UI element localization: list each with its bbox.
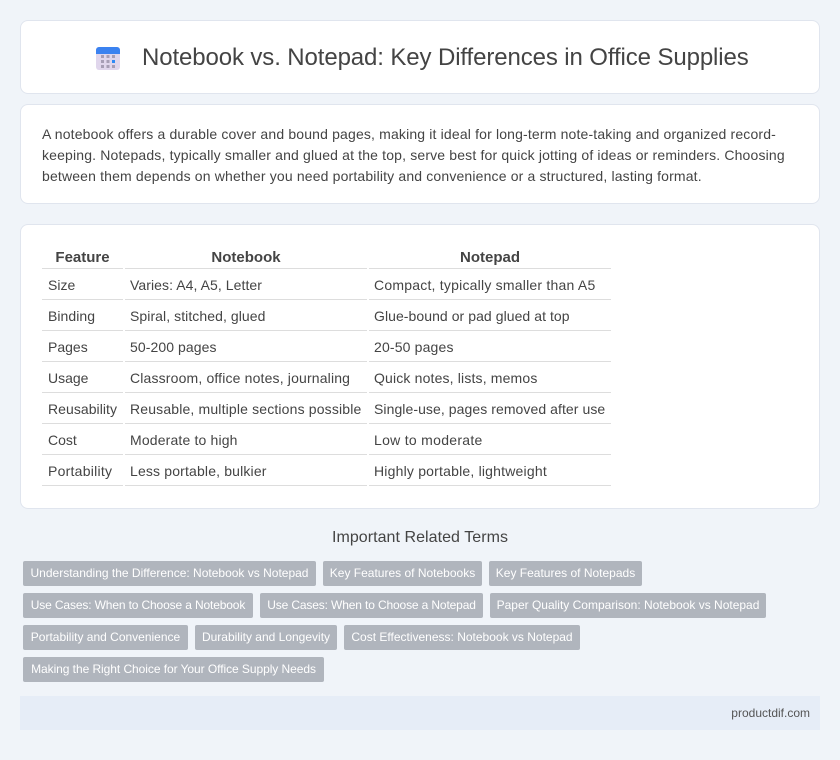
text block: introduction: [42, 126, 785, 184]
table header: Notebook: [211, 249, 281, 266]
text block: introduction: between them depends on whether you need portability and convenience or a structured, lasting format.: [42, 168, 702, 184]
row: portability: Highly portable, lightweight: [374, 463, 547, 479]
icon: calendar: [96, 47, 120, 70]
row: binding: Glue-bound or pad glued at top: [374, 308, 570, 324]
footer: [20, 696, 820, 730]
text block: introduction: A notebook offers a durable cover and bound pages, making it ideal for long-term note-taking and organized record-: [42, 126, 776, 142]
related term tags: Key Features of Notebooks: [330, 566, 475, 580]
table header: Feature: [55, 249, 110, 266]
row: usage: Usage: [48, 370, 88, 386]
related term tags: Portability and Convenience: [31, 630, 180, 644]
related term tags: Key Features of Notepads: [496, 566, 635, 580]
related term tags: Making the Right Choice for Your Office Supply Needs: [31, 662, 316, 676]
row: cost: Low to moderate: [374, 432, 483, 448]
text block: introduction: keeping. Notepads, typically smaller and glued at the top, serve best for quick jotting of ideas or reminders. Choosing: [42, 147, 785, 163]
row: binding: Spiral, stitched, glued: [130, 308, 265, 324]
heading: related terms: Important Related Terms: [332, 529, 508, 546]
row: portability: Less portable, bulkier: [130, 463, 267, 479]
table header: [55, 249, 520, 266]
panel: title header: [20, 20, 820, 94]
row: cost: Cost: [48, 432, 77, 448]
row: usage: Classroom, office notes, journaling: [130, 370, 350, 386]
row: reusability: Reusability: [48, 401, 117, 417]
table header: Notepad: [460, 249, 520, 266]
related term tags: Paper Quality Comparison: Notebook vs Notepad: [497, 598, 759, 612]
row: binding: [48, 308, 570, 324]
row: pages: 50-200 pages: [130, 339, 217, 355]
related term tags: Understanding the Difference: Notebook vs Notepad: [31, 566, 308, 580]
footer source: productdif.com: [731, 706, 810, 720]
row: portability: [48, 463, 547, 479]
related term tags: Use Cases: When to Choose a Notebook: [31, 598, 245, 612]
row: size: Compact, typically smaller than A5: [374, 277, 595, 293]
row: reusability: Single-use, pages removed after use: [374, 401, 605, 417]
row: usage: Quick notes, lists, memos: [374, 370, 538, 386]
panel: introduction: [20, 104, 820, 204]
row: portability: Portability: [48, 463, 112, 479]
row: pages: [48, 339, 454, 355]
row: usage: [48, 370, 538, 386]
related term tags: Cost Effectiveness: Notebook vs Notepad: [351, 630, 573, 644]
row: pages: 20-50 pages: [374, 339, 454, 355]
related term tags: Use Cases: When to Choose a Notepad: [267, 598, 476, 612]
row: pages: Pages: [48, 339, 88, 355]
panel: comparison table: [20, 224, 820, 509]
related term tags: Durability and Longevity: [202, 630, 330, 644]
row: cost: [48, 432, 483, 448]
title: Notebook vs. Notepad: Key Differences in Office Supplies: [142, 44, 749, 71]
row: size: [48, 277, 595, 293]
row: size: Size: [48, 277, 75, 293]
row: cost: Moderate to high: [130, 432, 238, 448]
row: size: Varies: A4, A5, Letter: [130, 277, 262, 293]
related term tags: [23, 561, 766, 682]
row: binding: Binding: [48, 308, 95, 324]
row: reusability: [48, 401, 605, 417]
row: reusability: Reusable, multiple sections possible: [130, 401, 361, 417]
